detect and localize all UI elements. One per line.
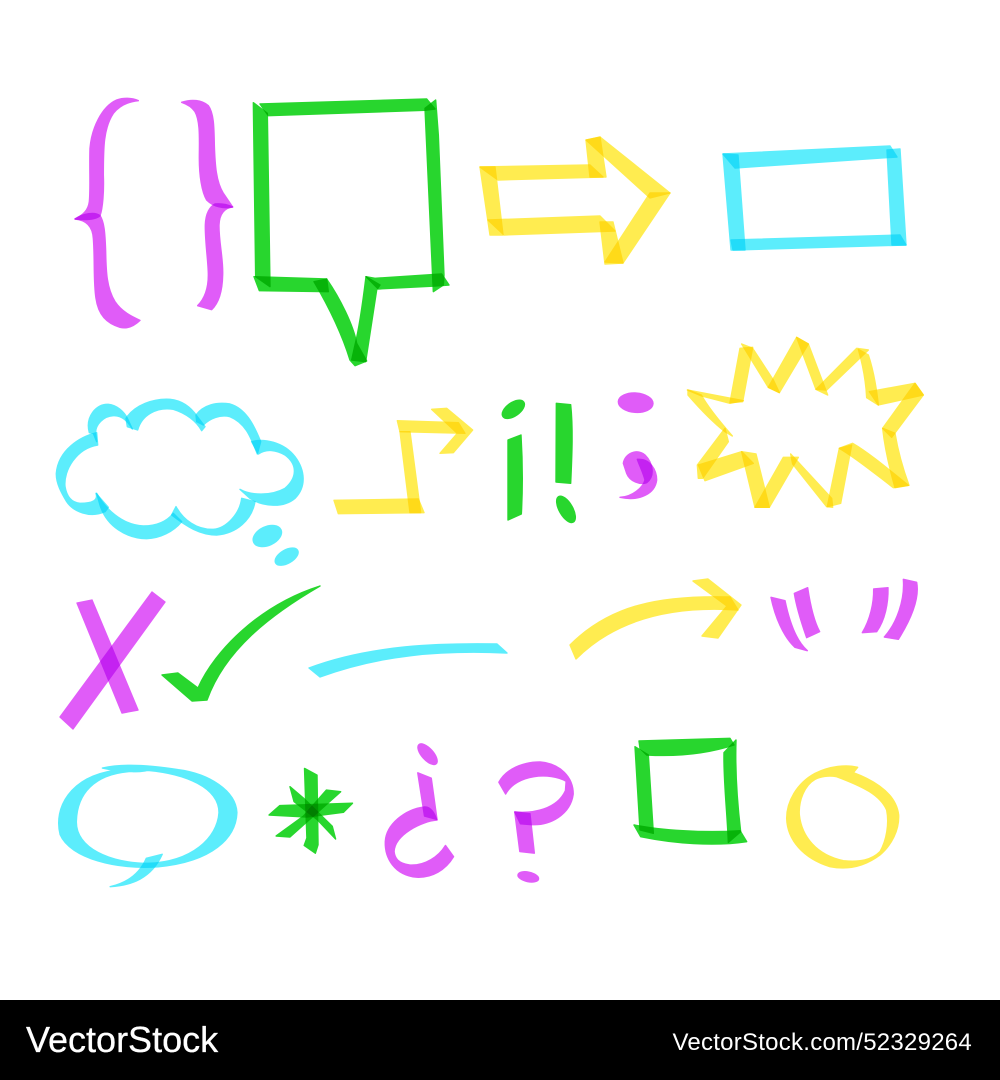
icon: cyan oval speech bubble (59, 765, 237, 887)
icon: magenta question mark (499, 762, 573, 884)
icon: green exclamation mark (553, 403, 579, 525)
icon: green square (634, 738, 747, 844)
icon: cyan rectangle (723, 146, 906, 250)
icon: magenta X mark (60, 592, 165, 729)
icon: yellow starburst (687, 337, 923, 507)
icon: green inverted exclamation mark (499, 397, 528, 520)
source url: VectorStock.com/52329264 (672, 1029, 972, 1056)
icon: yellow block arrow (480, 137, 670, 264)
icon: magenta left brace (75, 98, 140, 328)
icon: green asterisk (269, 768, 353, 853)
icon: magenta inverted question mark (385, 741, 454, 877)
icon: green check mark (162, 586, 320, 701)
icon: magenta quotation marks (771, 579, 917, 651)
icon: yellow curved arrow (570, 579, 741, 659)
icon: magenta semicolon (618, 392, 657, 498)
icon: cyan thought cloud (56, 399, 303, 569)
watermark bar (0, 1000, 1000, 1080)
logo text: VectorStock (26, 1019, 218, 1060)
icon: yellow circle (787, 766, 899, 868)
icon: magenta right brace (182, 100, 233, 310)
icon: yellow step arrow (334, 408, 473, 514)
icon: cyan stroke line (309, 644, 507, 677)
icon: green speech bubble (253, 99, 449, 366)
